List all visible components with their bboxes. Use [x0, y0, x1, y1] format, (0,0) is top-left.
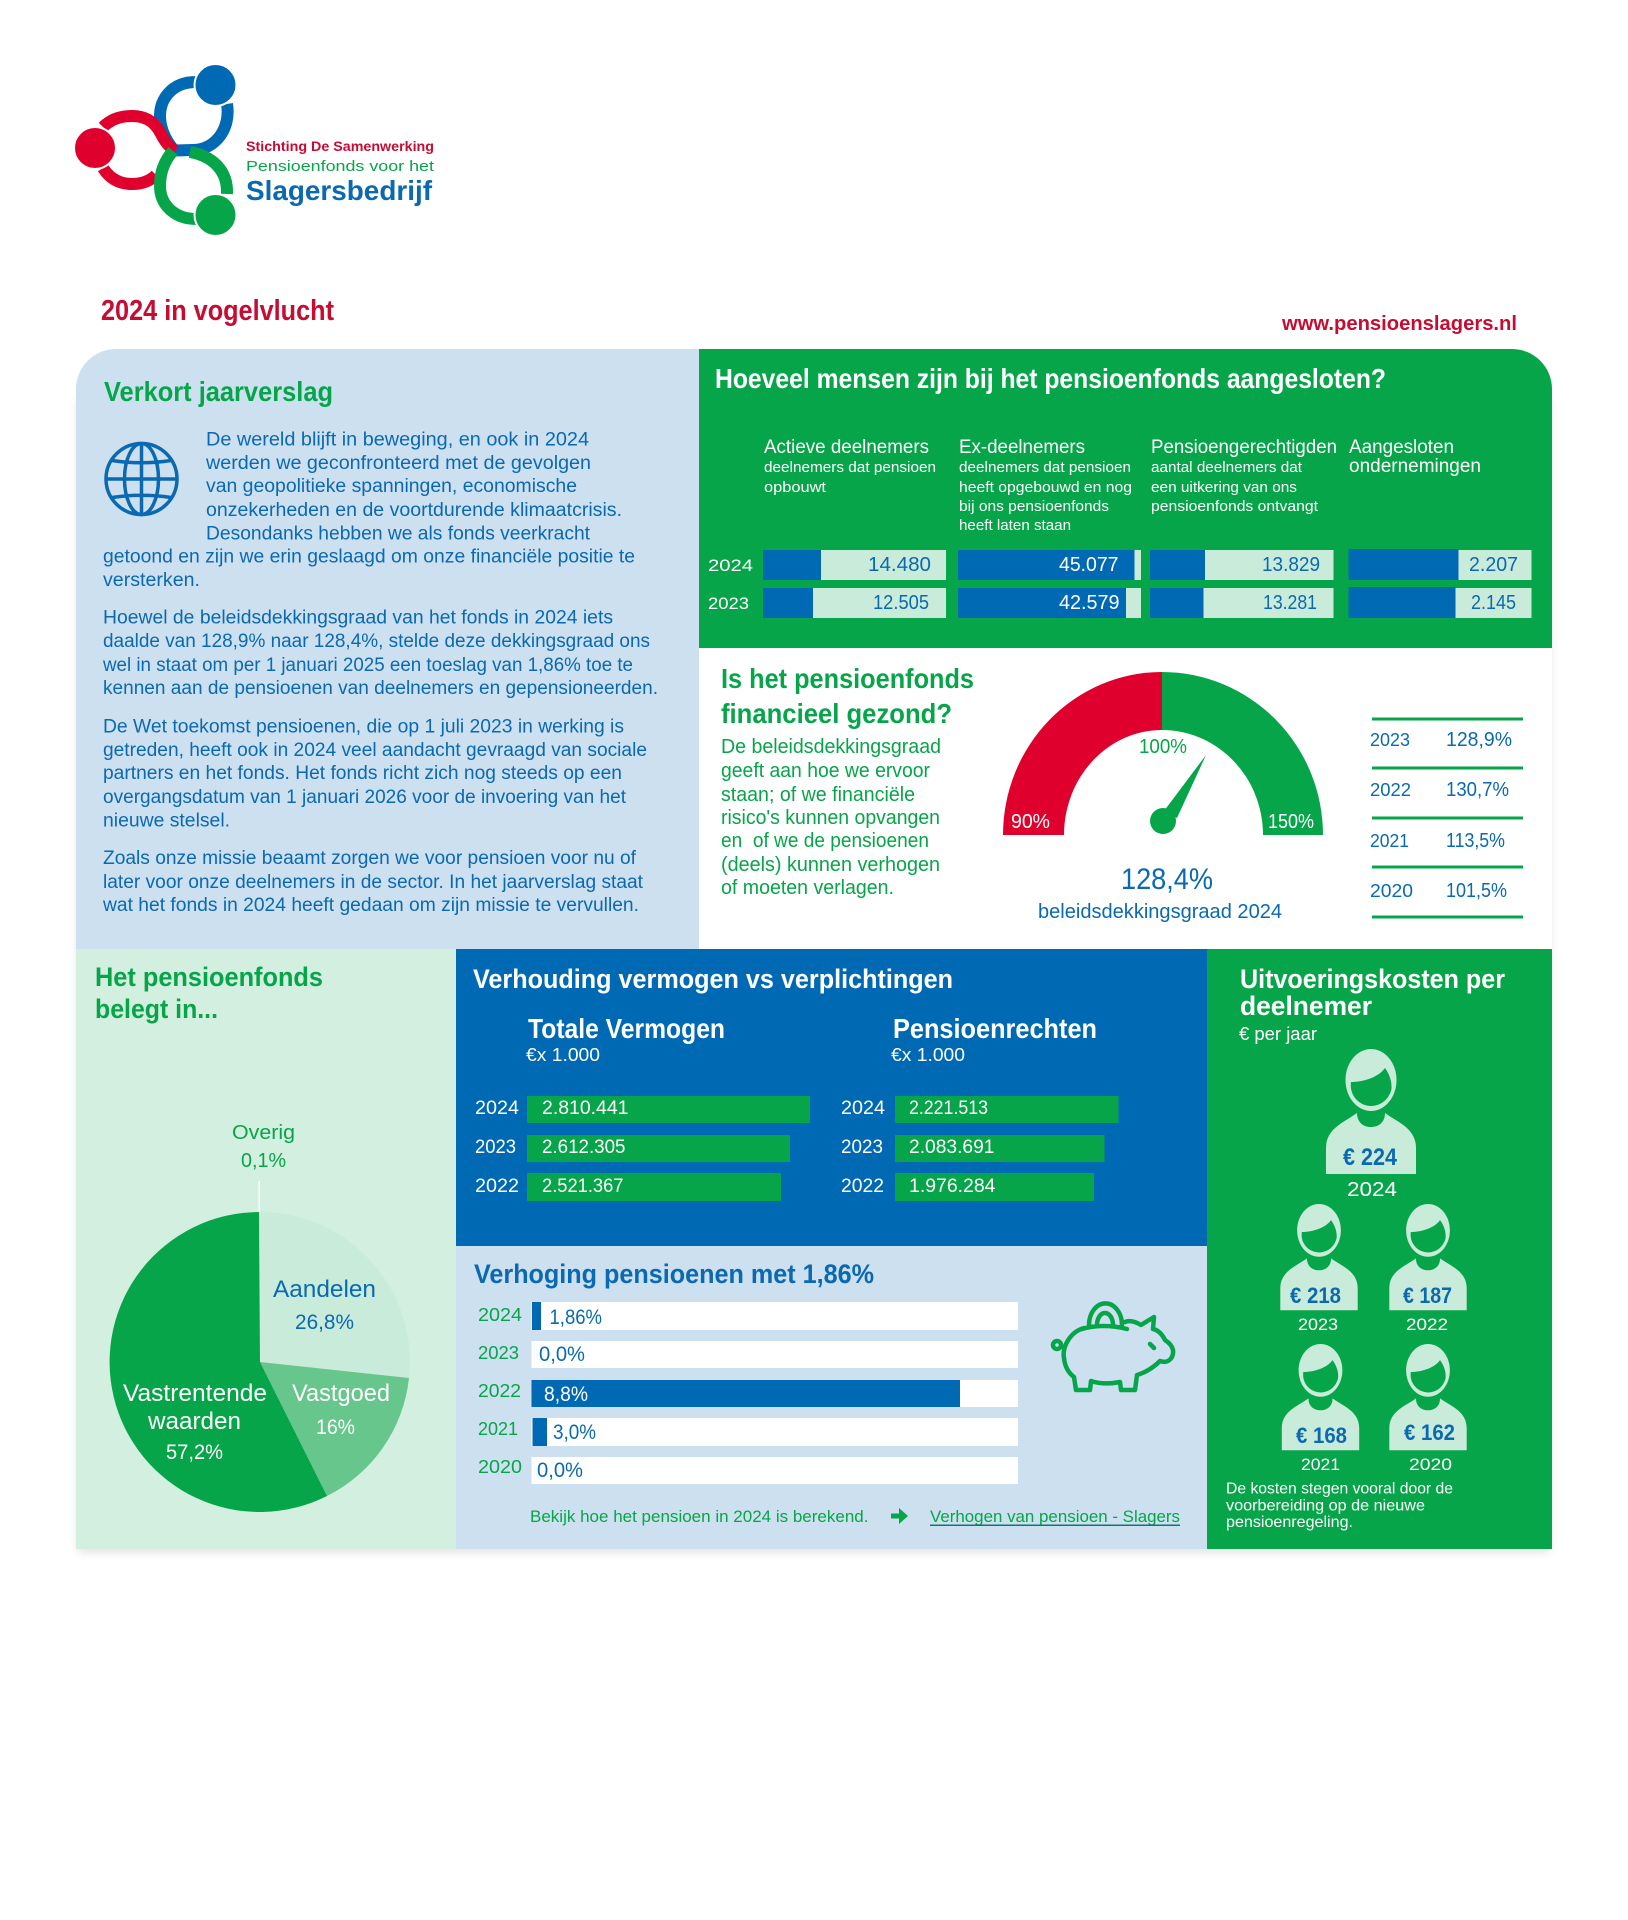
gauge [1003, 672, 1323, 835]
table: history: 2023 [1370, 730, 1410, 750]
person 2021: € 168 [1296, 1423, 1347, 1448]
heading: Uitvoeringskosten per [1240, 964, 1505, 994]
text block: intro: getoond en zijn we erin geslaagd om onze financiële positie te [103, 546, 635, 568]
year labels: 2023 [708, 594, 749, 613]
website url: www.pensioenslagers.nl [1281, 313, 1517, 335]
bars: pensioengerechtigden: 13.281 [1263, 592, 1317, 614]
text block: wet toekomst pensioenen: getreden, heeft ook in 2024 veel aandacht gevraagd van sociale [103, 740, 647, 761]
logo [74, 64, 435, 236]
column: actieve deelnemers: deelnemers dat pensioen [764, 459, 936, 476]
bar chart: totale vermogen: 2.521.367 [542, 1176, 624, 1197]
note: pensioenregeling. [1226, 1514, 1353, 1531]
text block: wet toekomst pensioenen: overgangsdatum van 1 januari 2026 voor de invoering van het [103, 787, 627, 808]
column: ex-deelnemers: deelnemers dat pensioen [959, 459, 1131, 476]
table: history: 128,9% [1446, 729, 1512, 751]
person 2020: 2020 [1409, 1455, 1452, 1474]
bar chart: 2020 [478, 1457, 522, 1477]
column: ex-deelnemers: heeft laten staan [959, 517, 1071, 534]
column: aangesloten ondernemingen [1349, 437, 1481, 477]
bar chart: totale vermogen: 2022 [475, 1176, 519, 1197]
person 2022 [1389, 1204, 1467, 1334]
note: De kosten stegen vooral door de [1226, 1480, 1453, 1498]
bar chart: totale vermogen: 2024 [475, 1098, 519, 1119]
heading [1240, 964, 1505, 1021]
text block: staan; of we financiële [721, 784, 915, 806]
person 2020 [1389, 1344, 1467, 1474]
text block: intro: onzekerheden en de voortdurende klimaatcrisis. [206, 500, 622, 521]
person 2024: € 224 [1343, 1144, 1398, 1171]
pie chart [110, 1181, 410, 1512]
text block: missie: Zoals onze missie beaamt zorgen we voor pensioen voor nu of [103, 848, 637, 869]
text block: intro: versterken. [103, 570, 200, 591]
bars: aangesloten ondernemingen [1348, 549, 1532, 618]
column: actieve deelnemers: Actieve deelnemers [764, 437, 929, 458]
text block: of moeten verlagen. [721, 877, 894, 899]
column: actieve deelnemers: opbouwt [764, 479, 827, 496]
text block: beleidsdekkingsgraad: Hoewel de beleidsdekkingsgraad van het fonds in 2024 iets [103, 608, 613, 628]
person 2022: 2022 [1406, 1315, 1448, 1334]
text block: risico's kunnen opvangen [721, 807, 940, 829]
column: ex-deelnemers: bij ons pensioenfonds [959, 498, 1109, 515]
bar chart: totale vermogen: 2.810.441 [542, 1098, 628, 1119]
bar chart: totale vermogen: 2023 [475, 1137, 516, 1158]
logo text: Pensioenfonds voor het [246, 158, 435, 175]
subheading: pensioenrechten: Pensioenrechten [893, 1013, 1097, 1044]
panel: aantal aangeslotenen [699, 349, 1552, 648]
label: aandelen [273, 1276, 376, 1334]
heading: Hoeveel mensen zijn bij het pensioenfonds aangesloten? [715, 363, 1386, 394]
heading: deelnemer [1240, 991, 1372, 1021]
gauge value: 128,4% [1121, 863, 1213, 896]
text block: geeft aan hoe we ervoor [721, 760, 930, 782]
table: history: 130,7% [1446, 779, 1509, 801]
year labels [708, 556, 753, 613]
heading [721, 663, 974, 729]
bar chart: pensioenrechten: 2022 [841, 1176, 884, 1197]
text block: De beleidsdekkingsgraad [721, 736, 941, 758]
person 2021: 2021 [1301, 1455, 1340, 1474]
text block: intro: Desondanks hebben we als fonds veerkracht [206, 524, 591, 544]
link text: Bekijk hoe het pensioen in 2024 is berekend. [530, 1507, 868, 1526]
bar chart: 2023 [478, 1343, 519, 1363]
column: aangesloten ondernemingen: ondernemingen [1349, 456, 1481, 477]
text block: wet toekomst pensioenen [103, 716, 647, 832]
text block: beleidsdekkingsgraad: kennen aan de pensioenen van deelnemers en gepensioneerden. [103, 678, 658, 699]
label: vastgoed: 16% [316, 1416, 355, 1439]
page title: 2024 in vogelvlucht [101, 295, 334, 327]
person 2023: € 218 [1290, 1283, 1341, 1308]
text block: wet toekomst pensioenen: nieuwe stelsel. [103, 810, 230, 832]
column: pensioengerechtigden: Pensioengerechtigden [1151, 437, 1337, 458]
label: vastgoed [292, 1380, 390, 1439]
bar chart: 2024 [478, 1305, 522, 1325]
gauge: 100% [1139, 736, 1187, 758]
gauge: 150% [1268, 811, 1314, 833]
heading: Het pensioenfonds [95, 962, 323, 992]
heading: belegt in... [95, 994, 218, 1024]
panel: financieel gezond [699, 648, 1552, 949]
heading: financieel gezond? [721, 698, 952, 729]
text block: intro: werden we geconfronteerd met de gevolgen [205, 453, 591, 474]
bars: ex-deelnemers: 42.579 [1059, 592, 1120, 614]
panel: uitvoeringskosten [1207, 949, 1552, 1549]
bar chart: 1,86% [550, 1306, 602, 1329]
note [1226, 1480, 1453, 1531]
text block: en of we de pensioenen [721, 830, 929, 852]
column: ex-deelnemers: heeft opgebouwd en nog [959, 479, 1132, 496]
label: vastrentende waarden: Vastrentende [123, 1380, 267, 1407]
page shadow [78, 400, 1550, 1552]
text block: missie: later voor onze deelnemers in de sector. In het jaarverslag staat [103, 872, 644, 893]
column: actieve deelnemers [764, 437, 936, 496]
table: history: 101,5% [1446, 880, 1507, 902]
subheading: totale vermogen: €x 1.000 [526, 1045, 600, 1065]
column: ex-deelnemers: Ex-deelnemers [959, 437, 1085, 458]
heading: Verhouding vermogen vs verplichtingen [473, 964, 953, 994]
column: pensioengerechtigden: pensioenfonds ontvangt [1151, 498, 1319, 515]
heading: Is het pensioenfonds [721, 663, 974, 694]
bar chart: 8,8% [544, 1383, 588, 1406]
bar chart: totale vermogen: 2.612.305 [542, 1137, 626, 1158]
text block: intro: De wereld blijft in beweging, en ook in 2024 [206, 430, 589, 450]
label: vastrentende waarden: 57,2% [166, 1441, 223, 1464]
bar chart: 3,0% [553, 1421, 596, 1444]
person 2023 [1280, 1204, 1358, 1334]
logo text: Stichting De Samenwerking [246, 138, 434, 154]
panel: beleggingen [76, 949, 456, 1549]
bars: pensioengerechtigden [1150, 550, 1334, 618]
column: pensioengerechtigden [1151, 437, 1337, 515]
label: vastrentende waarden: waarden [147, 1408, 241, 1435]
label: vastrentende waarden [123, 1380, 267, 1464]
bar chart: pensioenrechten [841, 1096, 1118, 1201]
year labels: 2024 [708, 556, 753, 575]
panel: vermogen vs verplichtingen [456, 949, 1207, 1246]
label: overig: Overig [232, 1122, 295, 1144]
bars: actieve deelnemers: 14.480 [868, 554, 931, 576]
column: ex-deelnemers [959, 437, 1132, 534]
bar chart: 2021 [478, 1419, 518, 1439]
bar chart: 0,0% [537, 1459, 583, 1482]
column: aangesloten ondernemingen: Aangesloten [1349, 437, 1454, 458]
text block: missie [102, 848, 644, 916]
bars: ex-deelnemers [958, 550, 1141, 618]
text block [721, 736, 941, 899]
logo symbol [74, 64, 236, 236]
bars: pensioengerechtigden: 13.829 [1262, 554, 1320, 576]
bar chart: pensioenrechten: 2023 [841, 1137, 883, 1158]
label: aandelen: 26,8% [295, 1311, 354, 1334]
bars: aangesloten ondernemingen: 2.207 [1469, 554, 1518, 576]
subheading: totale vermogen [526, 1013, 725, 1065]
person 2020: € 162 [1404, 1420, 1455, 1445]
table: history: 2022 [1370, 780, 1411, 800]
heading: Verhoging pensioenen met 1,86% [474, 1259, 874, 1289]
table: history: 2020 [1370, 881, 1413, 901]
person 2022: € 187 [1403, 1283, 1452, 1308]
gauge needle [1150, 755, 1206, 834]
bar chart: pensioenrechten: 2.083.691 [909, 1137, 994, 1158]
person 2023: 2023 [1298, 1315, 1338, 1334]
label: aandelen: Aandelen [273, 1276, 376, 1303]
subheading: pensioenrechten [891, 1013, 1097, 1065]
text block: beleidsdekkingsgraad: daalde van 128,9% naar 128,4%, stelde deze dekkingsgraad ons [103, 631, 650, 652]
bar chart: pensioenrechten: 2024 [841, 1098, 885, 1119]
text block: beleidsdekkingsgraad [102, 608, 658, 699]
subheading: € per jaar [1239, 1024, 1317, 1044]
person 2024: 2024 [1347, 1179, 1397, 1201]
heading: Verkort jaarverslag [104, 376, 333, 407]
bar chart: pensioenrechten: 1.976.284 [909, 1176, 996, 1197]
bar chart: pensioenrechten: 2.221.513 [909, 1098, 988, 1119]
bar chart: 2022 [478, 1381, 521, 1401]
bar chart [478, 1302, 1018, 1484]
bars: actieve deelnemers [763, 550, 946, 618]
logo text: Slagersbedrijf [246, 175, 433, 206]
column: pensioengerechtigden: een uitkering van ons [1151, 479, 1297, 496]
label: overig: 0,1% [241, 1150, 286, 1172]
text block: missie: wat het fonds in 2024 heeft gedaan om zijn missie te vervullen. [102, 895, 639, 916]
icon: piggy bank [1053, 1303, 1173, 1390]
panel: verhoging pensioenen [456, 1246, 1207, 1549]
table: history: 2021 [1370, 831, 1409, 851]
text block: (deels) kunnen verhogen [721, 854, 940, 876]
person 2021 [1282, 1344, 1359, 1474]
bars: actieve deelnemers: 12.505 [873, 592, 929, 614]
person 2024 [1326, 1049, 1416, 1201]
gauge caption: beleidsdekkingsgraad 2024 [1038, 901, 1282, 923]
gauge: 90% [1011, 811, 1050, 833]
link: Verhogen van pensioen - Slagers [930, 1507, 1180, 1526]
panel: verkort jaarverslag [76, 349, 699, 949]
bars: ex-deelnemers: 45.077 [1059, 554, 1118, 576]
logo text [246, 138, 435, 206]
heading [95, 962, 323, 1024]
icon: globe [106, 444, 177, 514]
table: history [1370, 718, 1523, 918]
text block: intro: van geopolitieke spanningen, economische [206, 476, 577, 497]
icon: arrow [891, 1508, 908, 1524]
column: pensioengerechtigden: aantal deelnemers dat [1151, 459, 1303, 476]
bar chart: totale vermogen [475, 1096, 810, 1201]
subheading: totale vermogen: Totale Vermogen [528, 1013, 725, 1044]
label: overig [232, 1122, 295, 1172]
bars: aangesloten ondernemingen: 2.145 [1471, 592, 1516, 614]
subheading: pensioenrechten: €x 1.000 [891, 1045, 965, 1065]
text block: intro [103, 430, 635, 591]
table: history: 113,5% [1446, 830, 1505, 852]
bar chart: 0,0% [539, 1343, 585, 1366]
note: voorbereiding op de nieuwe [1226, 1498, 1425, 1514]
text block: wet toekomst pensioenen: De Wet toekomst pensioenen, die op 1 juli 2023 in werking is [103, 716, 624, 738]
text block: wet toekomst pensioenen: partners en het fonds. Het fonds richt zich nog steeds op een [103, 763, 622, 784]
label: vastgoed: Vastgoed [292, 1380, 390, 1407]
text block: beleidsdekkingsgraad: wel in staat om per 1 januari 2025 een toeslag van 1,86% toe te [102, 655, 633, 676]
